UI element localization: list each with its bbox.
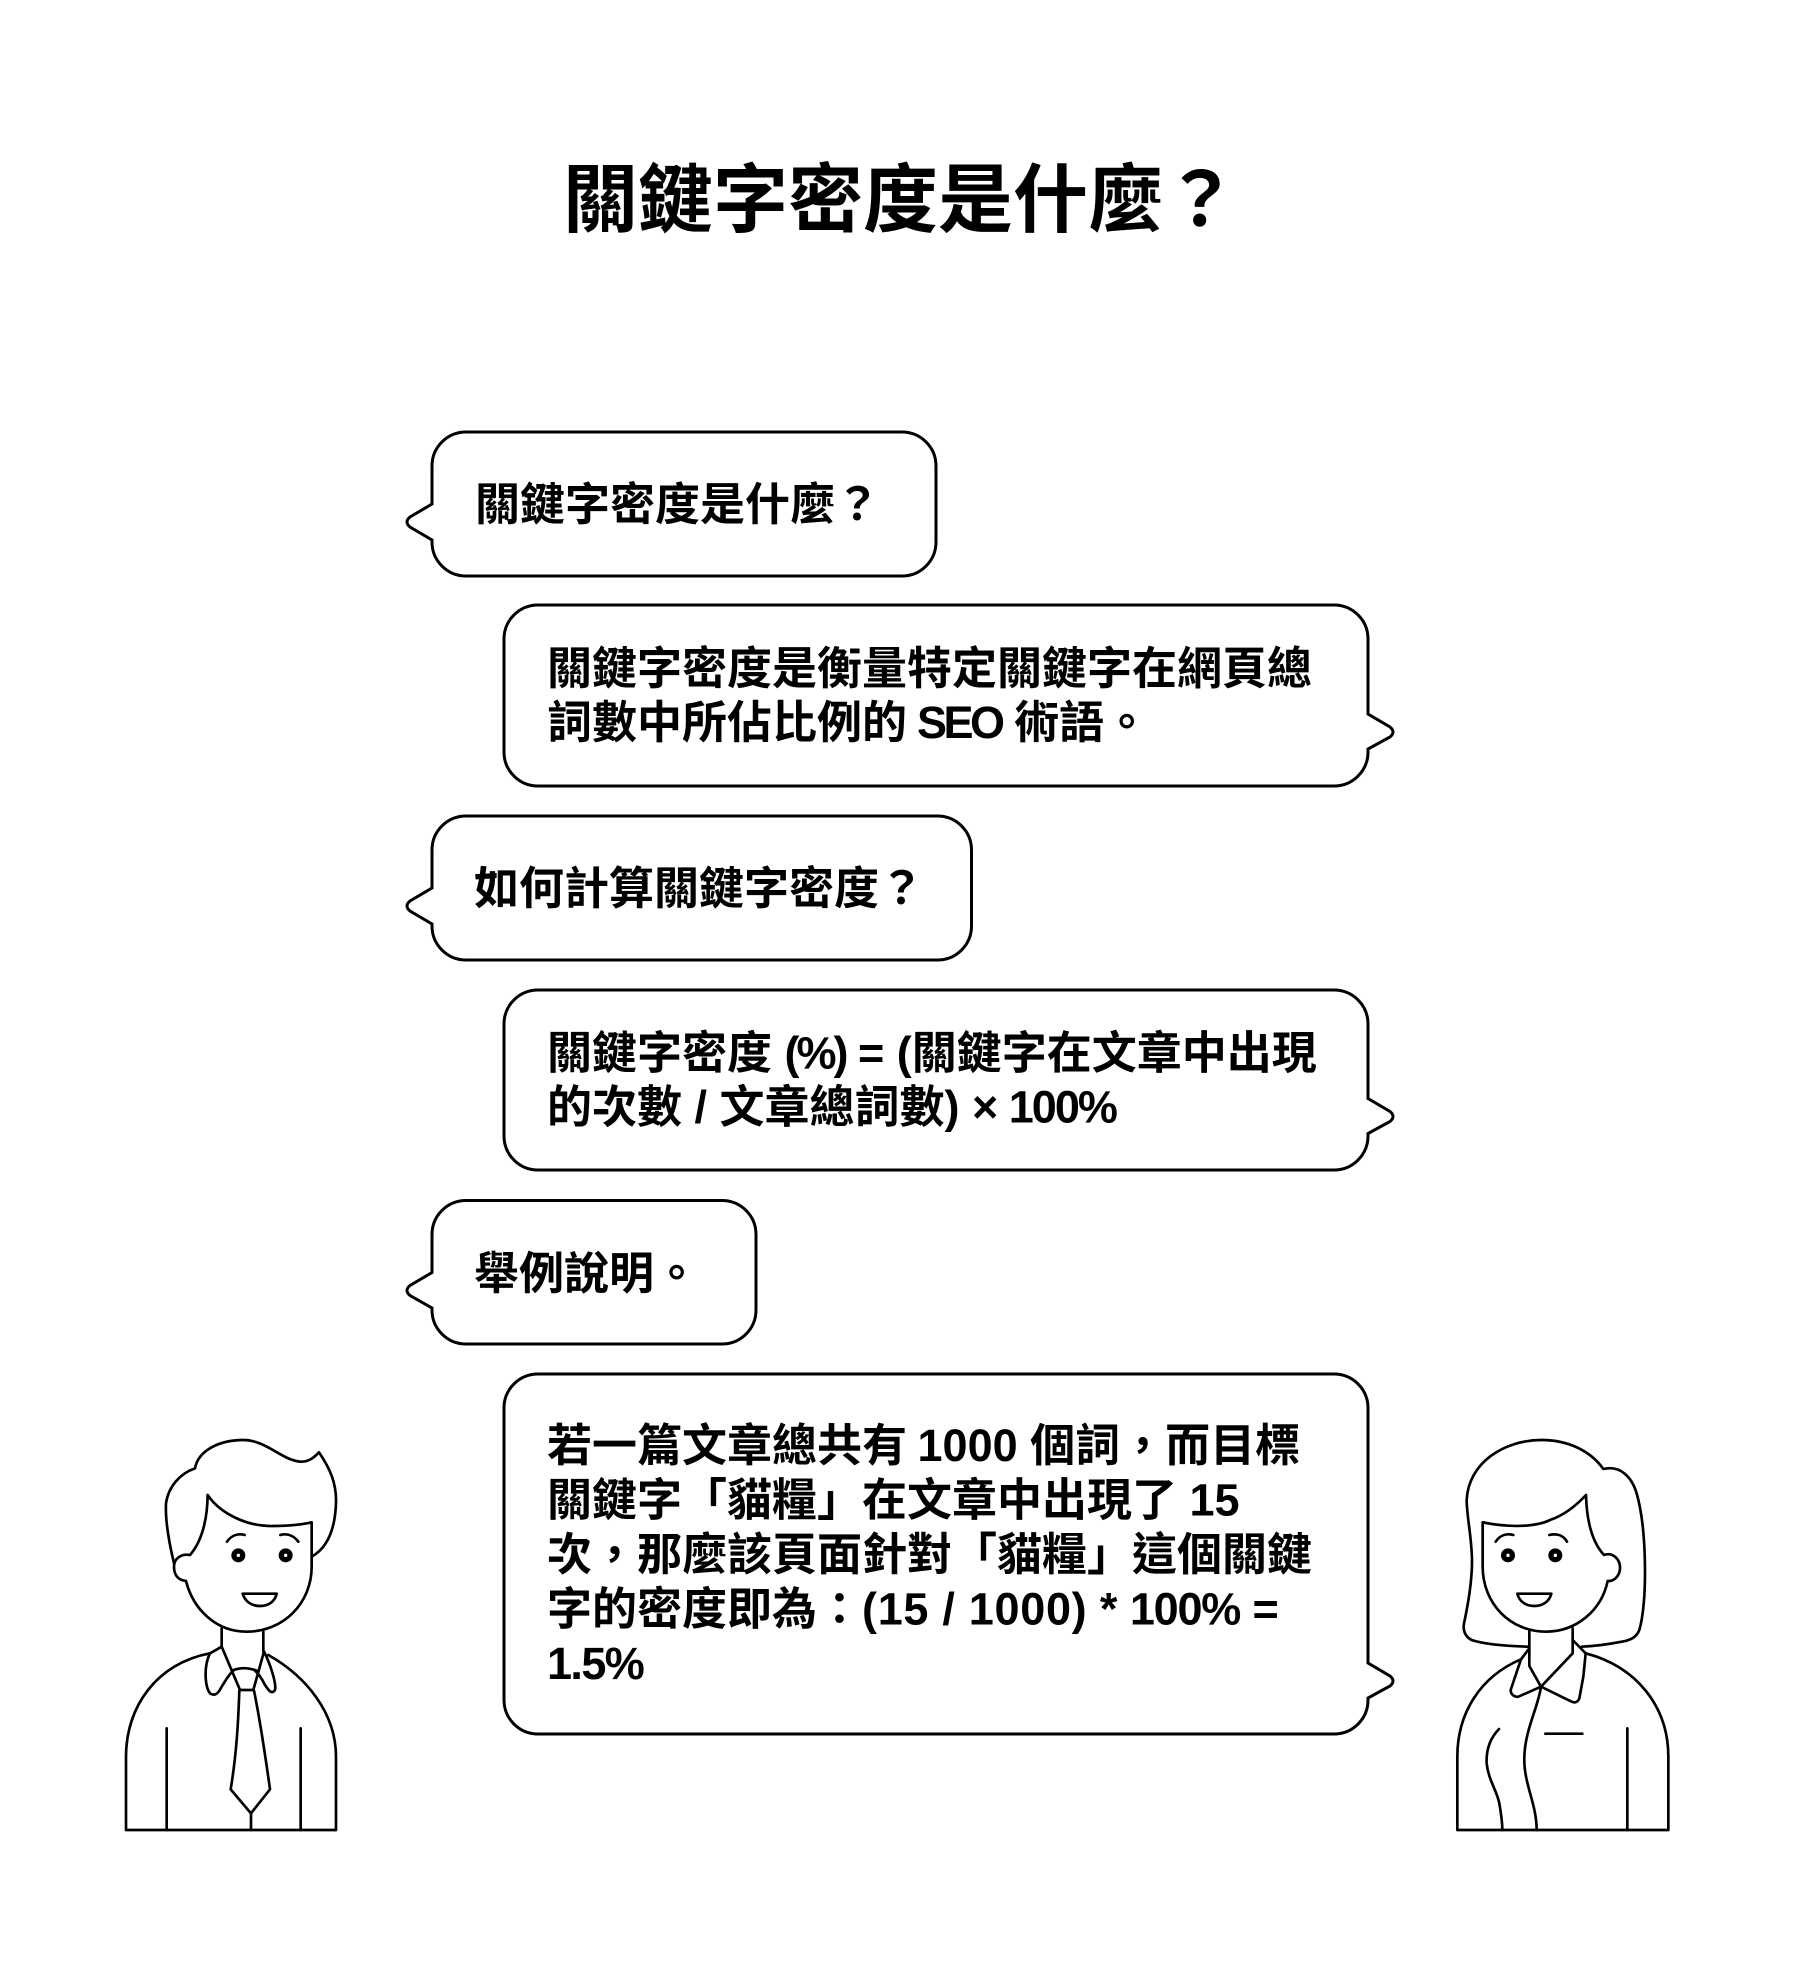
speech bubble: answer 1: 關鍵字密度是衡量特定關鍵字在網頁總 (547, 643, 1312, 694)
speech bubble: answer 2: 關鍵字密度 (%) = (關鍵字在文章中出現 (547, 1028, 1317, 1078)
speech bubble: question 2 (407, 816, 972, 960)
speech bubble: question 3 (407, 1200, 756, 1344)
speech bubble: answer 1 (504, 605, 1393, 786)
speech bubble: answer 3: 關鍵字「貓糧」在文章中出現了 15 (547, 1474, 1240, 1526)
speech bubble: answer 2 (504, 990, 1393, 1170)
speech bubble: question 1: 關鍵字密度是什麼？ (475, 479, 880, 530)
icon: woman with bob hair (1457, 1440, 1668, 1830)
speech bubble: answer 3 (504, 1374, 1393, 1734)
speech bubble: question 1 (407, 432, 936, 576)
speech bubble: answer 3: 次，那麼該頁面針對「貓糧」這個關鍵 (547, 1529, 1312, 1580)
icon: man with tie (126, 1440, 336, 1830)
speech bubble: answer 3: 1.5% (547, 1638, 644, 1689)
speech bubble: answer 3: 若一篇文章總共有 1000 個詞，而目標 (547, 1420, 1300, 1471)
speech bubble: question 2: 如何計算關鍵字密度？ (474, 863, 924, 914)
speech bubble: answer 2: 的次數 / 文章總詞數) × 100% (547, 1082, 1117, 1132)
speech bubble: answer 3: 字的密度即為：(15 / 1000) * 100% = (547, 1584, 1279, 1634)
speech bubble: question 3: 舉例說明。 (474, 1248, 699, 1299)
speech bubble: answer 1: 詞數中所佔比例的 SEO 術語。 (547, 697, 1149, 748)
title: 關鍵字密度是什麼？ (563, 158, 1238, 242)
